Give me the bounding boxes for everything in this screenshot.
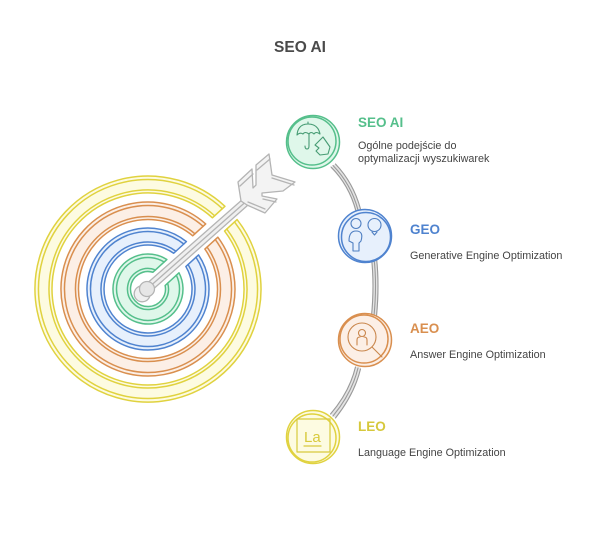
icon: La box — [297, 419, 330, 452]
icon: person and bulb — [349, 218, 381, 251]
label: GEO: GEO — [410, 222, 440, 237]
arrow head dot — [140, 282, 154, 296]
ring: blue — [62, 203, 234, 375]
circle: green — [286, 116, 340, 168]
node: SEO AI — [286, 115, 490, 168]
description: AEO: Answer Engine Optimization — [410, 349, 546, 361]
node: LEO — [286, 410, 506, 464]
label: SEO AI: SEO AI — [358, 115, 403, 130]
ring: yellow — [0, 130, 307, 449]
label: LEO: LEO — [358, 419, 386, 434]
target — [0, 130, 307, 449]
icon: umbrella and tag — [297, 122, 330, 155]
circle: blue — [338, 210, 392, 262]
description: GEO: Generative Engine Optimization — [410, 250, 562, 262]
label: AEO: AEO — [410, 321, 439, 336]
ring: orange — [25, 166, 271, 412]
description: LEO: Language Engine Optimization — [358, 447, 506, 459]
node: GEO — [338, 210, 562, 262]
arrow — [134, 154, 295, 302]
icon: magnifier — [348, 323, 382, 357]
node: AEO — [338, 314, 546, 366]
circle: yellow — [286, 410, 340, 464]
circle: orange — [338, 314, 392, 366]
connectors between circles — [330, 164, 378, 418]
arrow shaft — [134, 199, 248, 302]
arrow fletching — [238, 154, 295, 213]
title: SEO AI — [274, 39, 326, 56]
description: SEO AI: Ogólne podejście do — [358, 140, 456, 152]
icon: La box: La — [304, 429, 321, 446]
description: SEO AI — [358, 140, 490, 165]
ring: green — [99, 240, 197, 338]
description: SEO AI: optymalizacji wyszukiwarek — [358, 153, 490, 165]
